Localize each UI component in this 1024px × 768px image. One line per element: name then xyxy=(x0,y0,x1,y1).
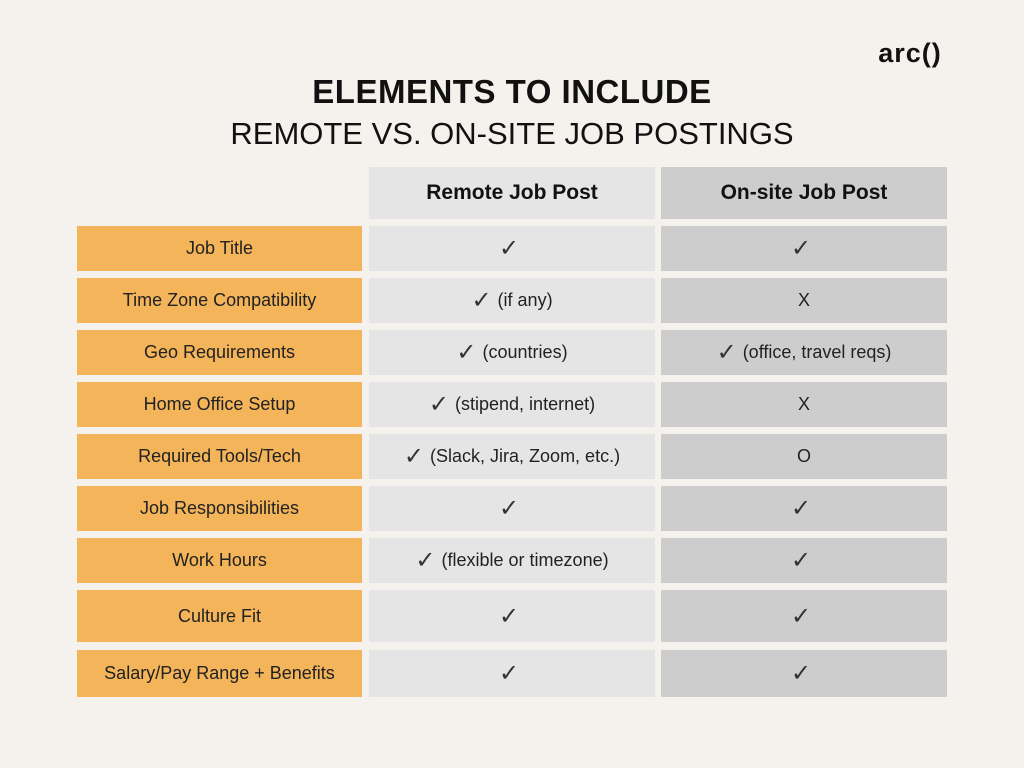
table xyxy=(369,167,947,219)
rows: Job Responsibilities xyxy=(140,498,299,518)
rows: X xyxy=(798,394,810,414)
rows: Job Title xyxy=(186,238,253,258)
rows: ✓ xyxy=(791,602,811,630)
rows: ✓ xyxy=(499,660,519,687)
rows: X xyxy=(798,290,810,310)
rows: Geo Requirements xyxy=(144,342,295,362)
rows: ✓ xyxy=(791,495,811,522)
rows: ✓ xyxy=(791,547,811,574)
rows: ✓ xyxy=(404,443,424,470)
rows: ✓ xyxy=(499,602,519,630)
rows: Time Zone Compatibility xyxy=(123,290,316,310)
rows: ✓ xyxy=(791,235,811,262)
header: remote: Remote Job Post xyxy=(426,181,598,204)
rows: Work Hours xyxy=(172,550,267,570)
rows: O xyxy=(797,446,811,466)
rows: Salary/Pay Range + Benefits xyxy=(104,663,335,683)
rows: (countries) xyxy=(483,342,568,362)
rows: Home Office Setup xyxy=(144,394,295,414)
header: remote xyxy=(369,167,655,219)
header: on-site xyxy=(661,167,947,219)
rows: ✓ xyxy=(717,339,737,366)
logo: arc() xyxy=(878,38,942,68)
subtitle: REMOTE VS. ON-SITE JOB POSTINGS xyxy=(230,116,794,151)
rows: ✓ xyxy=(499,495,519,522)
header: on-site: On-site Job Post xyxy=(721,181,887,204)
rows: ✓ xyxy=(471,287,492,314)
rows: (if any) xyxy=(498,290,553,310)
rows: ✓ xyxy=(791,660,811,687)
rows: (stipend, internet) xyxy=(455,394,595,414)
rows: ✓ xyxy=(499,235,519,262)
rows: (Slack, Jira, Zoom, etc.) xyxy=(430,446,620,466)
rows: (office, travel reqs) xyxy=(743,342,891,362)
rows: ✓ xyxy=(429,391,449,418)
rows: ✓ xyxy=(415,547,436,574)
rows: ✓ xyxy=(456,339,477,366)
rows: (flexible or timezone) xyxy=(442,550,609,570)
title: ELEMENTS TO INCLUDE xyxy=(312,73,712,110)
rows: Required Tools/Tech xyxy=(138,446,301,466)
rows: Culture Fit xyxy=(178,606,261,626)
